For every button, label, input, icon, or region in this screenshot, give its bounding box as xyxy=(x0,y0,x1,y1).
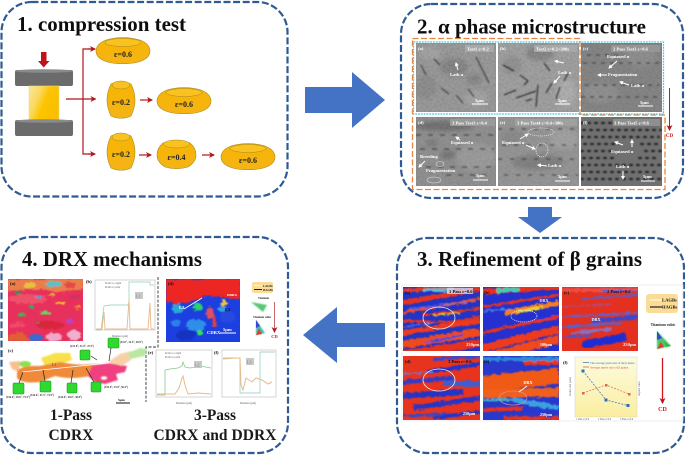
arrow: CD direction xyxy=(271,302,278,339)
line chart f: (f) xyxy=(563,360,568,365)
labels: Euler angles: (353.8°, 33.8°, 56.5°) xyxy=(104,386,128,389)
EBSD map 3-pass: (d) xyxy=(168,281,174,286)
EBSD map 1-pass: (a) xyxy=(10,281,16,286)
legend: boundary and IPF triangles: Titanium cubic xyxy=(253,316,272,319)
misorientation chart b: (b) xyxy=(86,279,92,284)
micrograph f: (f) xyxy=(583,120,588,125)
micrograph a: (a) xyxy=(418,46,424,51)
label: 3-Pass CDRX and DDRX xyxy=(154,407,277,444)
label: 3-Pass CDRX and DDRX: 3-Pass xyxy=(194,407,236,424)
misorientation chart e: (e) xyxy=(148,350,154,355)
labels: Euler angles: (356.6°, 38.6°, 72.5°) xyxy=(6,396,30,399)
line chart f: 2 Pass ε=0.6 xyxy=(598,418,612,421)
micrograph c: 2 Pass Test3 ε=0.6 xyxy=(613,46,649,52)
misorientation chart b: Distance (μm) xyxy=(112,335,128,338)
misorientation chart b: Point to origin xyxy=(105,282,122,285)
labels: Euler angles xyxy=(6,341,143,399)
micrograph d: Breeding xyxy=(420,154,438,159)
grain map c: 5μm xyxy=(118,398,125,402)
heading: DRX mechanisms: 4. DRX mechanisms xyxy=(22,247,202,271)
micrograph b: Test2 ε=0.2+300s xyxy=(536,46,569,52)
EBSD map e: 250μm xyxy=(540,412,553,417)
specimen: strain 0.4 three pass: ε=0.4 xyxy=(168,153,185,162)
heading: alpha phase microstructure: 2. α phase microstructure xyxy=(417,14,646,38)
divider: dashed separator xyxy=(146,277,158,402)
specimen: strain 0.2 three pass: ε=0.2 xyxy=(112,150,130,159)
line chart f: Aspect ratio xyxy=(637,381,641,396)
label: 1-Pass CDRX: CDRX xyxy=(48,427,94,444)
labels: Euler angles: (326.6°, 41.5°, 73.9°) xyxy=(30,394,54,397)
EBSD map 1-pass xyxy=(8,279,83,341)
micrograph e xyxy=(498,117,579,186)
micrograph b xyxy=(498,43,579,112)
misorientation chart b: L1 xyxy=(136,294,140,298)
EBSD map 3-pass: 5μm xyxy=(223,327,232,332)
specimen: strain 0.6 two pass xyxy=(157,88,211,114)
panel: compression test xyxy=(2,2,288,196)
EBSD map 3-pass: CDRX xyxy=(207,330,221,335)
arrow: down to refinement xyxy=(518,207,562,233)
EBSD map 3-pass: L2 xyxy=(179,305,185,310)
heading: compression test: 1. compression test xyxy=(17,12,186,36)
EBSD map e: DRX xyxy=(523,380,533,385)
grain map c xyxy=(8,348,147,403)
micrograph c: Equiaxed α xyxy=(607,54,630,59)
EBSD map b: (b) xyxy=(484,290,490,295)
specimen: strain 0.2 two pass: ε=0.2 xyxy=(112,98,130,107)
specimen: strain 0.6 two pass: ε=0.6 xyxy=(175,100,193,109)
micrograph a xyxy=(416,43,496,112)
misorientation chart f: Distance (μm) xyxy=(240,402,256,405)
EBSD map d: 250μm xyxy=(463,411,476,416)
legend: grain boundaries: LAGBs xyxy=(662,298,677,302)
arrow: CD direction xyxy=(658,358,667,413)
specimen: strain 0.2 three pass xyxy=(107,133,135,170)
misorientation chart e: Point to point xyxy=(165,356,180,359)
micrograph d xyxy=(416,117,496,186)
misorientation chart f xyxy=(214,350,276,405)
specimen: strain 0.6 single pass: ε=0.6 xyxy=(114,50,132,59)
legend: boundary and IPF triangles xyxy=(251,282,274,335)
grain map c: L1 xyxy=(52,362,56,367)
EBSD map e: (e) xyxy=(484,359,490,364)
micrograph c: Lath α xyxy=(631,83,645,88)
micrograph f: 3 Pass Test5 ε=0.6 xyxy=(614,120,650,126)
icon: compression press xyxy=(15,52,73,136)
labels: Euler angles: (251.8°, 31.8°, 47.5°) xyxy=(70,345,94,348)
specimen: strain 0.6 single pass xyxy=(96,38,150,64)
labels: Euler angles: (55.8°, 34.5°, 40.8°) xyxy=(120,341,143,344)
frame: figure outline xyxy=(402,285,683,421)
micrograph f: Lath α xyxy=(616,164,630,169)
micrograph d: 3 Pass Test3 ε=0.4 xyxy=(452,120,488,126)
misorientation chart f: L3 xyxy=(247,360,251,364)
micrograph b: Lath α xyxy=(558,70,572,75)
EBSD map d: (d) xyxy=(405,359,411,364)
EBSD map c: (c) xyxy=(564,290,570,295)
micrograph d: 5μm xyxy=(476,173,485,178)
EBSD map a: (a) xyxy=(405,290,411,295)
line chart f xyxy=(563,357,641,421)
arrow: CD direction: CD xyxy=(666,134,673,139)
EBSD map 3-pass: DDRX xyxy=(227,293,238,297)
line chart f: Grain size (μm) xyxy=(568,377,572,396)
labels: Euler angles: (326.6°, 38.0°, 38.8°) xyxy=(58,396,82,399)
misorientation chart f: (f) xyxy=(214,350,219,355)
frame: orange dashed group xyxy=(412,38,665,190)
arrow: CD direction: CD xyxy=(658,407,667,413)
micrograph f: 5μm xyxy=(643,174,652,179)
EBSD map a xyxy=(403,287,480,351)
panel: DRX mechanisms xyxy=(2,237,288,453)
legend: orientation triangle xyxy=(651,323,676,349)
EBSD map b: 100μm xyxy=(540,342,553,347)
micrograph e: Equiaxed α xyxy=(502,140,525,145)
EBSD map c: 250μm xyxy=(623,342,636,347)
legend: grain boundaries xyxy=(646,294,678,313)
specimen: strain 0.6 three pass: ε=0.6 xyxy=(239,156,257,165)
legend: orientation triangle: Titanium cubic xyxy=(651,323,676,327)
line chart f: Average aspect ratio of β grains xyxy=(590,366,629,370)
micrograph d: (d) xyxy=(418,120,424,125)
label: 1-Pass CDRX xyxy=(48,407,94,444)
micrograph e: Lath α xyxy=(548,163,562,168)
EBSD map 3-pass xyxy=(166,279,240,342)
specimen: strain 0.6 three pass xyxy=(221,144,275,170)
micrograph d: Equiaxed α xyxy=(451,140,474,145)
EBSD map a: 250μm xyxy=(466,342,479,347)
misorientation chart e: Distance (μm) xyxy=(176,402,192,405)
arrows: branch connectors xyxy=(66,49,214,155)
specimen: strain 0.4 three pass xyxy=(157,140,196,169)
EBSD map b xyxy=(483,287,559,351)
micrograph f: Equiaxed α xyxy=(611,149,634,154)
EBSD map c xyxy=(562,287,638,351)
EBSD map c: DRX xyxy=(591,317,601,322)
arrow: CD direction xyxy=(666,88,673,139)
misorientation chart e: Point to origin xyxy=(165,352,182,355)
arrows: cube pointers xyxy=(19,348,111,383)
micrograph c: (c) xyxy=(583,46,589,51)
heading: refinement of beta grains: 3. Refinement of β grains xyxy=(417,247,642,271)
micrograph e: 3 Pass Test4 ε=0.4+300s xyxy=(517,120,563,126)
micrograph a: 5μm xyxy=(475,98,484,103)
arrow: to microstructure xyxy=(305,72,385,128)
EBSD map c: 2 Pass ε=0.6 xyxy=(607,289,631,294)
micrograph b: 5μm xyxy=(558,98,567,103)
line chart f: 1 Pass ε=0.6 xyxy=(576,418,590,421)
panel: alpha phase microstructure xyxy=(401,4,683,198)
label: 1-Pass CDRX: 1-Pass xyxy=(50,407,92,424)
EBSD map d xyxy=(403,356,480,420)
arrow: CD direction: CD xyxy=(271,334,278,339)
arrow: to DRX mechanisms xyxy=(303,307,385,363)
micrograph d: Fragmentation xyxy=(426,168,456,173)
micrograph c: 5μm xyxy=(640,100,649,105)
misorientation chart e xyxy=(148,350,212,405)
micrograph a: Test1 ε=0.2 xyxy=(467,46,489,52)
micrograph b: (b) xyxy=(500,46,506,51)
line chart f: The average grain size of the β phase xyxy=(590,361,635,365)
micrograph c xyxy=(581,43,662,112)
micrograph e: 5μm xyxy=(558,174,567,179)
grain map c: (c) xyxy=(8,348,14,353)
micrograph c: Fragmentation xyxy=(608,72,638,77)
micrograph a: Lath α xyxy=(450,72,464,77)
EBSD map 3-pass: L3 xyxy=(225,307,231,312)
label: 3-Pass CDRX and DDRX: CDRX and DDRX xyxy=(154,427,277,444)
legend: boundary and IPF triangles: Titanium xyxy=(258,297,270,300)
micrograph e: (e) xyxy=(500,120,506,125)
legend: grain boundaries: HAGBs xyxy=(662,304,678,310)
EBSD map e xyxy=(483,356,559,420)
misorientation chart b xyxy=(86,279,155,338)
legend: boundary and IPF triangles: LAGBs xyxy=(263,284,274,288)
EBSD map b: DRX xyxy=(539,298,549,303)
line chart f: 3 Pass ε=0.6 xyxy=(620,418,634,421)
misorientation chart e: L2 xyxy=(195,362,199,368)
legend: boundary and IPF triangles: HAGBs xyxy=(263,288,274,292)
icons: crystal orientation cubes xyxy=(13,338,119,394)
EBSD map a: 1 Pass ε=0.6 xyxy=(449,289,473,294)
misorientation chart b: Point to point xyxy=(105,286,120,289)
panel: refinement of beta grains xyxy=(397,238,684,453)
micrograph f xyxy=(581,117,662,186)
frame: cyan dashed group xyxy=(414,42,664,114)
EBSD map d: 3 Pass ε=0.6 xyxy=(448,359,472,364)
specimen: strain 0.2 two pass xyxy=(107,81,135,118)
